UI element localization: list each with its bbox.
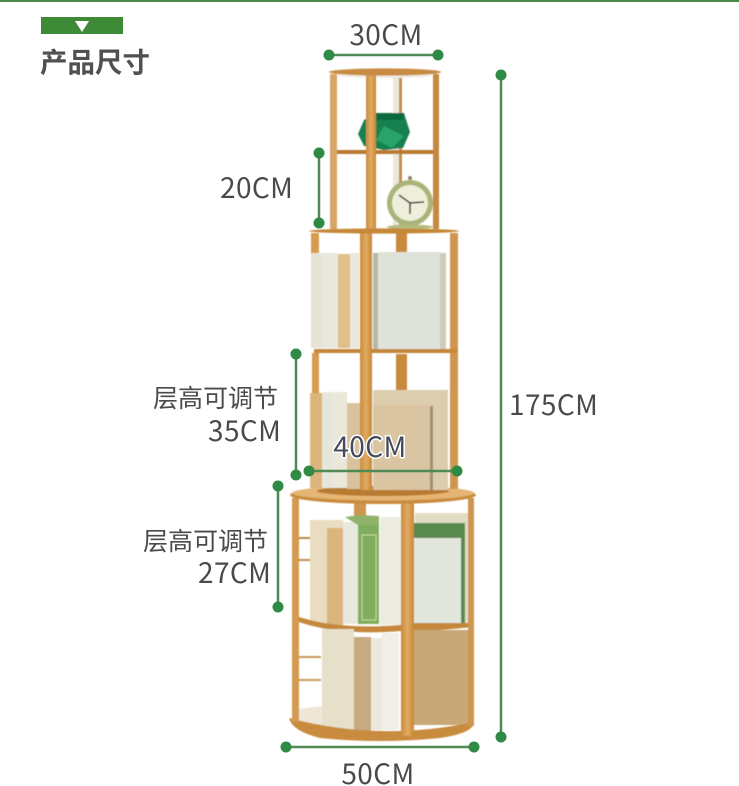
dimension: 30CM top width: 30CM	[349, 14, 423, 54]
bottom tier	[289, 486, 476, 741]
dimension: 50CM base width	[280, 742, 480, 786]
dimension: 40CM middle width: 40CM	[333, 426, 407, 466]
dimension: 30CM top width	[324, 14, 444, 60]
middle tier posts and top	[309, 228, 459, 496]
dimension: 40CM middle width	[304, 426, 462, 476]
dimension: adjustable 27CM: 27CM	[198, 552, 271, 592]
heading: 产品尺寸	[40, 40, 150, 80]
bookshelf	[289, 68, 476, 741]
dimension: adjustable 27CM: 层高可调节	[143, 522, 268, 558]
icon: green vase	[358, 113, 410, 150]
top green rule	[0, 0, 739, 2]
upper books	[311, 252, 446, 350]
icon: alarm clock	[387, 176, 433, 230]
header badge with triangle	[41, 17, 123, 34]
dimension: 175CM total height: 175CM	[509, 384, 598, 424]
dimension: adjustable 35CM: 层高可调节	[153, 379, 278, 415]
lower books	[310, 390, 448, 490]
back books	[414, 513, 471, 628]
dimension: adjustable 35CM: 35CM	[208, 410, 281, 450]
adjustment rungs	[298, 537, 321, 681]
upper books	[310, 515, 401, 626]
dimension: 175CM total height	[496, 70, 598, 742]
dimension: adjustable 27CM	[143, 480, 284, 612]
dimension: 20CM shelf height	[220, 148, 324, 228]
dimension: 20CM shelf height: 20CM	[220, 167, 293, 207]
top tier	[329, 68, 441, 230]
dimension: adjustable 35CM	[153, 348, 302, 480]
lower books	[298, 629, 470, 732]
